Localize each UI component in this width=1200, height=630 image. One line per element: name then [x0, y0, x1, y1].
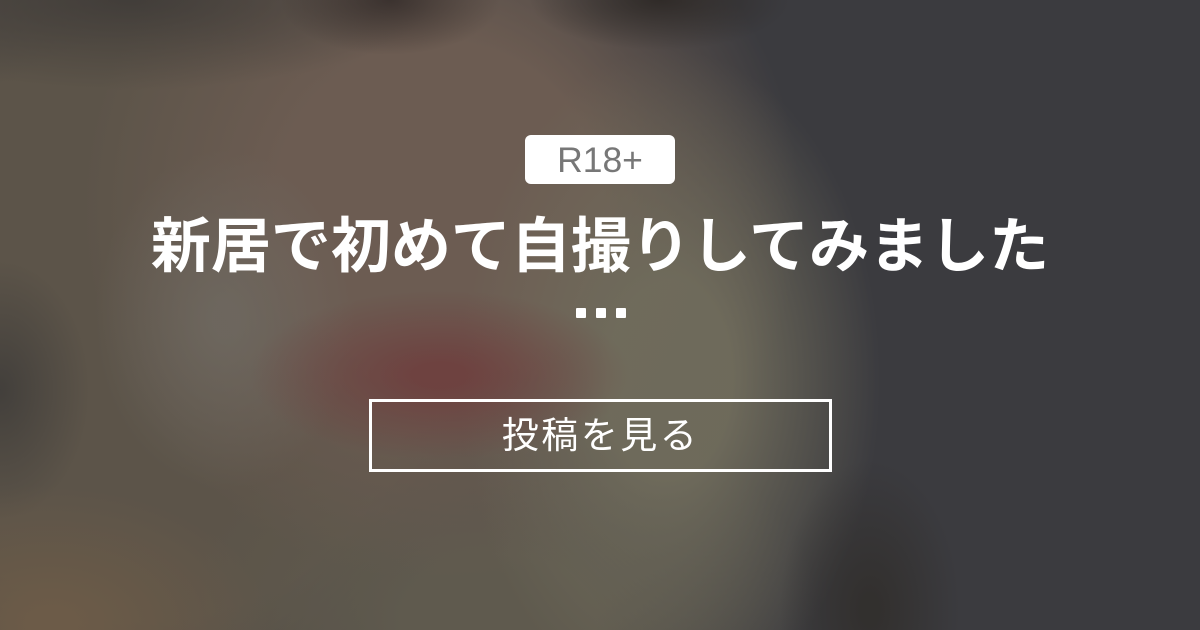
- title overflow dots: [576, 308, 626, 318]
- title: 新居で初めて自撮りしてみました: [151, 213, 1049, 280]
- R18 badge: R18+: [557, 140, 643, 180]
- button: view post: [369, 399, 832, 472]
- button: view post: 投稿を見る: [502, 415, 699, 456]
- R18 badge: [525, 135, 675, 184]
